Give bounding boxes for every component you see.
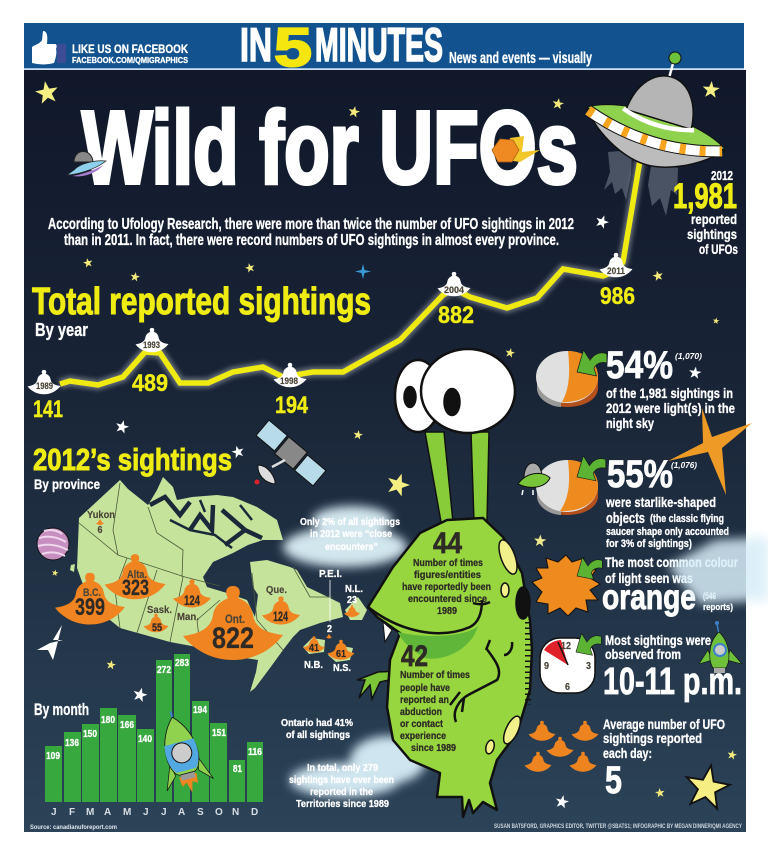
bar values: 116 bbox=[248, 746, 262, 758]
alien stat 42: Number of times bbox=[400, 669, 470, 681]
year markers and values: 2011 bbox=[607, 266, 625, 276]
province labels and values: B.C. bbox=[83, 587, 101, 599]
year markers and values: 489 bbox=[132, 370, 168, 397]
stat: 55% starlike: objects bbox=[606, 511, 645, 527]
month letters: O bbox=[215, 807, 223, 818]
saucer exhaust bbox=[604, 150, 678, 216]
masthead: In 5 Minutes: 5 bbox=[274, 16, 312, 78]
2012 total callout: 2012 bbox=[711, 168, 733, 183]
Ontario note: of all sightings bbox=[286, 729, 350, 741]
bar values: 109 bbox=[46, 750, 60, 762]
month letters: S bbox=[197, 807, 204, 818]
orange burst bbox=[532, 555, 600, 616]
stat: orange light: (546 bbox=[703, 591, 716, 602]
province labels and values: 323 bbox=[122, 575, 149, 600]
stat: 54% lights: night sky bbox=[606, 415, 654, 431]
territories note: sightings have ever been bbox=[289, 774, 394, 786]
cloud: right edge bbox=[668, 537, 768, 604]
month letters: J bbox=[161, 807, 167, 818]
stat: orange light: of light seen was bbox=[605, 571, 693, 586]
alien stat 42: abduction bbox=[400, 706, 442, 718]
alien spots bbox=[484, 538, 530, 755]
stat: time of sightings: Most sightings were bbox=[605, 632, 711, 648]
province labels and values: 822 bbox=[212, 622, 254, 655]
alien mouth bbox=[368, 600, 490, 633]
bars bbox=[45, 654, 263, 802]
province labels and values: N.B. bbox=[304, 660, 323, 671]
stat: average per day: 5 bbox=[605, 759, 622, 802]
stat: average per day: Average number of UFO bbox=[603, 716, 725, 732]
small saucer by title bbox=[67, 152, 106, 176]
alien eyes bbox=[395, 349, 515, 433]
stat: 55% starlike: 55% bbox=[607, 453, 673, 496]
clock icon: 3 bbox=[586, 661, 591, 672]
month letters: A bbox=[178, 807, 185, 818]
Ontario note: Ontario had 41% bbox=[281, 717, 354, 729]
arrow bbox=[576, 633, 601, 655]
alien stat 42: experience bbox=[400, 730, 446, 742]
alien stat 44: 44 bbox=[433, 527, 462, 560]
intro text: than in 2011. In fact, there were record numbers of UFO sightings in almost every province. bbox=[64, 232, 559, 249]
alien stat 42: since 1989 bbox=[411, 742, 456, 754]
alien stat 44: figures/entities bbox=[414, 569, 481, 581]
province labels and values: Ont. bbox=[225, 612, 245, 626]
orange star bbox=[668, 408, 752, 495]
territories note: reported in the bbox=[310, 786, 373, 798]
scattered stars bbox=[34, 79, 738, 810]
alien left arm bbox=[357, 671, 398, 699]
line chart of yearly sightings bbox=[60, 160, 640, 385]
month letters: J bbox=[143, 807, 149, 818]
antenna bbox=[669, 52, 681, 78]
alien stat 44: encountered since bbox=[408, 593, 487, 605]
alien right arm bbox=[450, 640, 512, 722]
heading: total reported sightings: By year bbox=[35, 320, 88, 340]
arrow bbox=[577, 456, 606, 481]
province labels and values: 399 bbox=[75, 594, 105, 621]
intro text: According to Ufology Research, there were more than twice the number of UFO sightings in 2012 bbox=[48, 216, 574, 233]
five orange saucers bbox=[524, 721, 598, 772]
by month heading: By month bbox=[34, 700, 89, 719]
icon: rocket on bars bbox=[147, 705, 216, 799]
alien character bbox=[357, 349, 532, 817]
province labels and values: 55 bbox=[152, 622, 162, 634]
year markers and values: 1998 bbox=[280, 376, 298, 386]
stat: 55% starlike: for 3% of sightings) bbox=[606, 538, 692, 550]
bar values: 150 bbox=[83, 728, 97, 740]
bar values bbox=[46, 657, 262, 775]
month letters: J bbox=[51, 807, 57, 818]
stat: orange light: The most common colour bbox=[605, 555, 739, 570]
year markers and values: 986 bbox=[600, 283, 635, 310]
close encounters note: Only 2% of all sightings bbox=[300, 516, 400, 528]
alien neck shadow bbox=[398, 626, 478, 659]
arrow bbox=[577, 557, 602, 579]
alien stat 44: Number of times bbox=[413, 557, 483, 569]
bar values: 180 bbox=[101, 714, 115, 726]
stat: 55% starlike: saucer shape only accounted bbox=[606, 526, 729, 538]
alien stat 42 bbox=[400, 640, 470, 754]
bar values: 140 bbox=[138, 733, 152, 745]
big flying saucer bbox=[576, 52, 740, 185]
province labels and values: P.E.I. bbox=[319, 569, 342, 580]
month letters: N bbox=[232, 807, 239, 818]
alien stat 44: 1989 bbox=[437, 605, 457, 617]
stat: 54% lights: (1,070) bbox=[675, 352, 702, 361]
stat: 55% starlike: (1,076) bbox=[671, 461, 697, 470]
icon: facebook thumbs up bbox=[32, 31, 66, 64]
year markers and values: 2004 bbox=[444, 285, 464, 295]
alien stat 42: or contact bbox=[400, 718, 443, 730]
2012 total callout: sightings bbox=[687, 226, 737, 242]
alien tooth bbox=[383, 622, 392, 642]
alien stat 42: people have bbox=[400, 682, 450, 694]
cloud: upper map bbox=[283, 506, 407, 567]
province labels and values: Man. bbox=[177, 612, 199, 623]
province labels and values: Yukon bbox=[87, 510, 115, 521]
intro text bbox=[48, 216, 574, 249]
province labels and values: 6 bbox=[98, 525, 103, 536]
year markers and values: 194 bbox=[275, 392, 309, 419]
month letters: M bbox=[123, 807, 131, 818]
year markers and values: 1989 bbox=[36, 381, 53, 391]
province labels and values bbox=[75, 510, 363, 674]
year markers and values: 141 bbox=[33, 396, 63, 423]
alien stat 44 bbox=[402, 527, 491, 617]
alien eye stalks bbox=[425, 432, 489, 522]
close encounters note bbox=[300, 516, 400, 553]
stat: orange light: reports) bbox=[703, 602, 733, 613]
stat: average per day bbox=[524, 716, 725, 802]
month letters: A bbox=[104, 807, 111, 818]
month letters: D bbox=[251, 807, 258, 818]
facebook text bbox=[72, 42, 188, 65]
stat: 55% starlike: (the classic flying bbox=[650, 513, 724, 525]
bar values: 194 bbox=[193, 704, 207, 716]
province labels and values: N.L. bbox=[345, 584, 363, 595]
masthead: In 5 Minutes: MINUTES bbox=[315, 18, 443, 71]
2012 total callout: of UFOs bbox=[699, 241, 738, 257]
pie chart 54% bbox=[536, 351, 598, 407]
pie chart 55% bbox=[536, 460, 598, 515]
clock icon: 9 bbox=[544, 661, 549, 672]
comet in title bbox=[492, 136, 540, 162]
2012 total callout: reported bbox=[691, 211, 737, 227]
2012 total callout bbox=[673, 168, 738, 257]
alien stat 42: reported an bbox=[400, 694, 449, 706]
stat: average per day: each day: bbox=[603, 745, 652, 761]
small green saucer bbox=[518, 463, 550, 495]
icon: small rocket bbox=[699, 621, 742, 673]
header bar bbox=[24, 16, 744, 78]
stat: time of sightings bbox=[540, 621, 742, 703]
province labels and values: 61 bbox=[336, 649, 346, 660]
bar values: 151 bbox=[212, 727, 226, 739]
bar values: 283 bbox=[175, 657, 189, 669]
province labels and values: 124 bbox=[273, 608, 288, 624]
icon: striped planet bbox=[37, 528, 69, 560]
bar values: 136 bbox=[65, 737, 79, 749]
clock icon bbox=[540, 638, 595, 693]
province labels and values: Que. bbox=[266, 585, 287, 596]
stat: average per day: sightings reported bbox=[603, 730, 702, 746]
bar values: 272 bbox=[157, 664, 171, 676]
alien body bbox=[368, 518, 532, 817]
province labels and values: Sask. bbox=[147, 605, 172, 616]
heading: total reported sightings: Total reported sightings bbox=[32, 281, 371, 323]
saucer body bbox=[576, 56, 740, 185]
close encounters note: in 2012 were “close bbox=[310, 528, 392, 540]
alien stat 44: have reportedly been bbox=[402, 581, 491, 593]
alien back ridges bbox=[525, 622, 531, 705]
year markers and values: 1993 bbox=[143, 340, 160, 350]
stat: 54% lights: of the 1,981 sightings in bbox=[606, 385, 733, 401]
stat: 54% lights: 2012 were light(s) in the bbox=[606, 400, 735, 416]
territories note bbox=[289, 762, 394, 810]
stat: 55% starlike: were starlike-shaped bbox=[605, 494, 716, 510]
by month bar chart bbox=[34, 654, 263, 818]
2012 total callout: 1,981 bbox=[673, 177, 737, 216]
territories note: Territories since 1989 bbox=[296, 798, 389, 810]
month letters bbox=[51, 807, 258, 818]
alien stat 42: 42 bbox=[401, 640, 428, 673]
clock icon: 12 bbox=[561, 641, 571, 652]
year markers and values: 882 bbox=[438, 302, 474, 329]
map of Canada bbox=[70, 477, 367, 692]
masthead: In 5 Minutes bbox=[240, 16, 443, 78]
province labels and values: 124 bbox=[184, 592, 200, 608]
heading: total reported sightings bbox=[32, 281, 371, 340]
province labels and values: 23 bbox=[347, 595, 357, 606]
province labels and values: N.S. bbox=[333, 663, 351, 674]
heading: 2012's sightings bbox=[33, 442, 232, 492]
month letters: M bbox=[86, 807, 94, 818]
province labels and values: 2 bbox=[327, 624, 332, 635]
masthead: In 5 Minutes: IN bbox=[240, 18, 272, 71]
bar values: 166 bbox=[120, 719, 134, 731]
month letters: F bbox=[69, 807, 75, 818]
stat: orange light: orange bbox=[602, 578, 696, 617]
Ontario note bbox=[281, 717, 354, 741]
tagline: News and events — visually bbox=[449, 50, 592, 67]
territories note: In total, only 279 bbox=[307, 762, 378, 774]
stat: orange light bbox=[532, 555, 739, 617]
stat: 55% starlike bbox=[518, 453, 729, 550]
facebook text: FACEBOOK.COM/QMIGRAPHICS bbox=[72, 55, 188, 65]
year markers and values bbox=[28, 253, 635, 423]
close encounters note: encounters” bbox=[325, 541, 378, 553]
province saucers bbox=[55, 519, 360, 660]
bar values: 81 bbox=[233, 763, 242, 775]
stat: 54% lights: 54% bbox=[606, 344, 673, 387]
heading: 2012's sightings: 2012’s sightings bbox=[33, 442, 232, 477]
facebook text: LIKE US ON FACEBOOK bbox=[72, 42, 188, 56]
cloud: bottom territories bbox=[290, 736, 426, 797]
heading: 2012's sightings: By province bbox=[34, 476, 100, 492]
arrow bbox=[577, 350, 607, 376]
title: Wild for UFOs bbox=[82, 90, 578, 205]
stat: 54% lights bbox=[536, 344, 752, 495]
province labels and values: 41 bbox=[309, 643, 319, 654]
icon: satellite bbox=[254, 420, 327, 486]
province labels and values: Alta. bbox=[127, 569, 147, 581]
clock icon: 6 bbox=[565, 682, 570, 693]
source line: Source: canadianuforeport.com bbox=[30, 824, 117, 831]
stat: time of sightings: observed from bbox=[605, 646, 681, 662]
